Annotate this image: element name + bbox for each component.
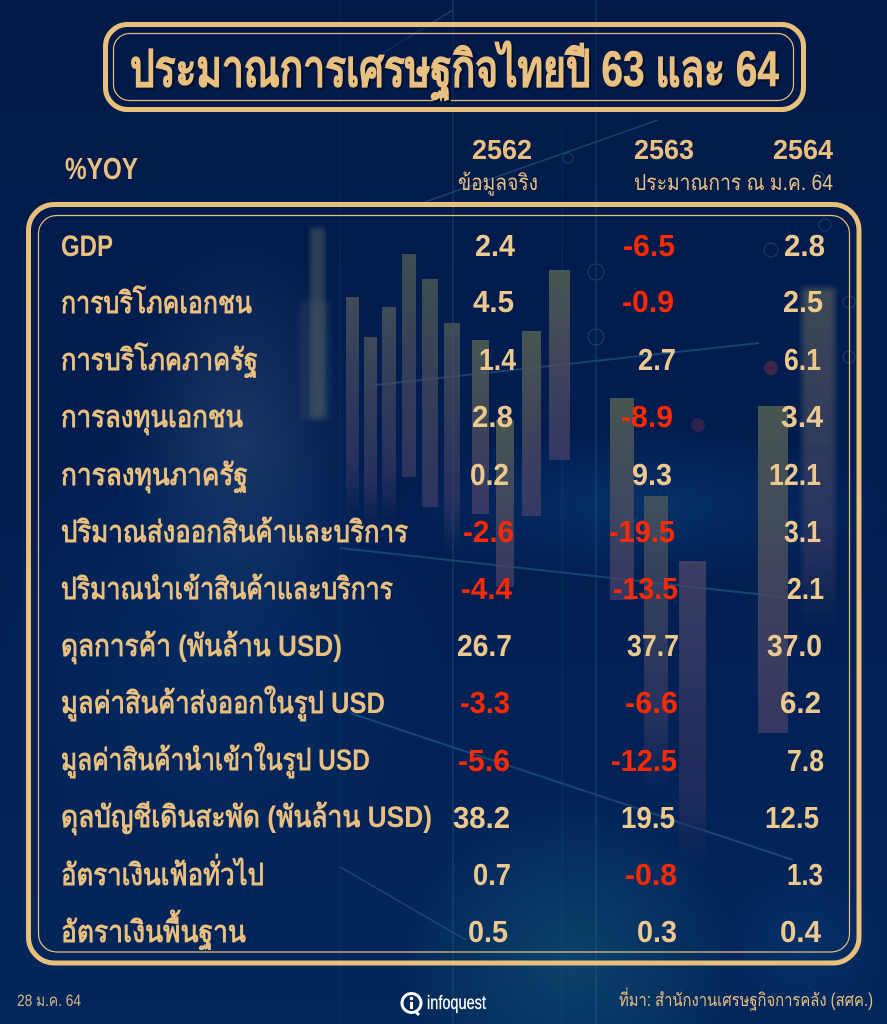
row: government consumption: การบริโภคภาครัฐ [61,341,258,380]
row: current account: ดุลบัญชีเดินสะพัด (พันล้าน USD) [61,801,432,836]
row: export value: มูลค่าสินค้าส่งออกในรูป USD [61,685,385,722]
row: government consumption [61,341,821,380]
row: private consumption: การบริโภคเอกชน [61,284,252,320]
row: headline inflation: 1.3 [787,857,823,892]
row: import volume: 2.1 [787,571,824,606]
year 2564: 2564 [773,134,833,165]
unit label: %YOY [65,151,138,186]
row: private investment: -8.9 [621,399,673,434]
row: export volume: ปริมาณส่งออกสินค้าและบริการ [61,516,408,549]
row: government consumption: 2.7 [638,342,676,377]
forecast label: ประมาณการ ณ ม.ค. 64 [634,170,833,195]
row: import volume: -13.5 [613,571,678,606]
row: export volume: -19.5 [609,514,675,549]
row: current account [61,800,819,836]
panel: data table [28,204,859,963]
row: import value: -12.5 [611,743,677,778]
row: export volume [61,514,821,549]
row: headline inflation: -0.8 [625,857,677,892]
column header [65,134,833,196]
logo: infoquest: infoquest [427,993,487,1014]
row: export value: 6.2 [780,685,821,720]
row: trade balance: ดุลการค้า (พันล้าน USD) [61,630,342,665]
row: government consumption: 6.1 [784,342,821,377]
row: private investment [61,399,824,436]
row: core inflation: อัตราเงินพื้นฐาน [61,909,246,952]
row: export volume: -2.6 [463,514,514,549]
row: government consumption: 1.4 [479,342,517,377]
row: private investment: การลงทุนเอกชน [61,401,243,436]
row: headline inflation [61,853,823,892]
row: export volume: 3.1 [784,514,821,549]
row: trade balance: 37.7 [627,628,679,663]
row: core inflation: 0.3 [637,914,677,949]
row: headline inflation: อัตราเงินเฟ้อทั่วไป [61,853,264,892]
row: government investment: การลงทุนภาครัฐ [61,459,248,495]
title box [106,24,804,110]
logo: infoquest [402,993,487,1015]
row: government investment: 9.3 [632,457,672,492]
year 2563: 2563 [634,134,694,165]
row: trade balance: 26.7 [457,628,512,663]
row: government investment: 12.1 [769,457,821,492]
actual data label: ข้อมูลจริง [458,170,538,196]
row: import value: -5.6 [458,743,510,778]
row: headline inflation: 0.7 [473,857,511,892]
row: trade balance: 37.0 [767,628,822,663]
row: current account: 38.2 [453,800,510,835]
row: private consumption: 2.5 [783,284,823,319]
row: private consumption [61,284,823,320]
row: import value: 7.8 [787,743,824,778]
row: import volume: ปริมาณนำเข้าสินค้าและบริการ [61,573,393,606]
row: core inflation: 0.4 [780,914,822,949]
row: GDP: 2.4 [475,228,516,263]
date: 28 ม.ค. 64 [17,991,81,1010]
row: GDP: 2.8 [784,228,825,263]
row: private investment: 2.8 [472,399,513,434]
row: current account: 19.5 [621,800,675,835]
candlestick bars [300,228,835,867]
row: import value: มูลค่าสินค้านำเข้าในรูป USD [61,742,370,779]
row: government investment: 0.2 [470,457,509,492]
row: trade balance [61,628,822,665]
row: core inflation [61,909,822,952]
row: GDP: -6.5 [623,228,675,263]
row: import volume: -4.4 [461,571,513,606]
row: export value: -3.3 [460,685,510,720]
row: private consumption: 4.5 [473,284,514,319]
year 2562: 2562 [472,134,532,165]
row: GDP [61,228,825,263]
row: export value: -6.6 [625,685,678,720]
row: private consumption: -0.9 [622,284,674,319]
row: export value [61,685,821,722]
row: GDP: GDP [61,230,113,263]
row: government investment [61,457,821,495]
row: core inflation: 0.5 [468,914,508,949]
row: current account: 12.5 [765,800,819,835]
row: private investment: 3.4 [781,399,824,434]
row: import volume [61,571,824,606]
row: import value [61,742,824,779]
